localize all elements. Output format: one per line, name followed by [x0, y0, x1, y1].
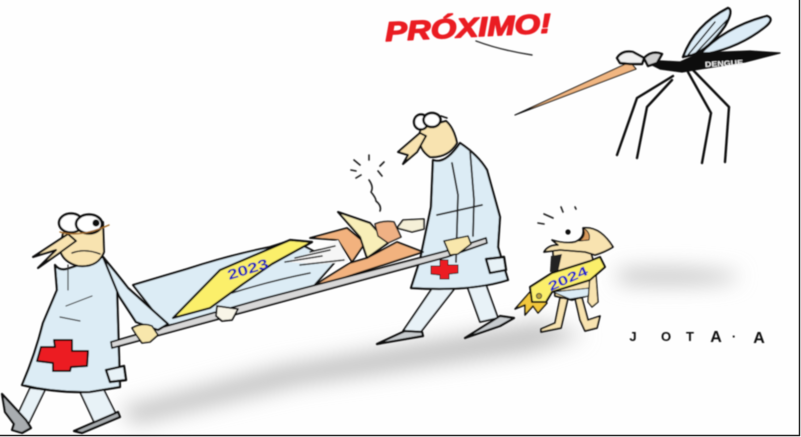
legs	[16, 388, 117, 425]
surprise marks	[538, 207, 576, 224]
child legs	[541, 298, 600, 332]
signature	[629, 329, 765, 347]
hand	[132, 324, 158, 343]
right doctor hands	[397, 219, 471, 255]
near hand	[444, 236, 471, 255]
sash 2024	[530, 257, 605, 302]
cap and glasses	[414, 114, 428, 130]
left doctor body	[2, 214, 126, 433]
chin shade line	[72, 251, 100, 254]
sash tassel	[515, 292, 547, 315]
right doctor	[377, 113, 514, 344]
sleeve	[103, 257, 168, 330]
cap and glasses	[59, 214, 83, 232]
speech line	[476, 41, 532, 55]
stretcher pole	[111, 238, 487, 348]
stretcher sheet	[133, 240, 335, 326]
signature: J	[629, 329, 637, 344]
shoes	[377, 316, 514, 344]
text: 2024: 2024	[546, 263, 591, 294]
stretcher and patient	[111, 212, 487, 348]
red cross	[431, 260, 458, 279]
proboscis	[515, 62, 636, 115]
ground shadows	[120, 268, 738, 424]
legs	[403, 282, 498, 333]
mosquito	[515, 8, 780, 163]
coat	[22, 257, 120, 392]
text: dengue: DENGUE	[705, 58, 743, 69]
child head	[544, 228, 613, 255]
white sheet lines	[286, 240, 349, 264]
yellow sash 2023	[173, 240, 312, 318]
patient collar	[338, 212, 388, 258]
patient head	[375, 221, 401, 243]
coat	[411, 143, 508, 289]
signature: A	[710, 329, 722, 346]
nappy	[553, 288, 590, 299]
signature: T	[686, 329, 694, 344]
beak	[398, 133, 426, 164]
red cross	[37, 340, 88, 371]
head	[617, 52, 644, 64]
far hand holding patient	[397, 219, 424, 232]
signature: O	[661, 329, 671, 344]
body and abdomen	[642, 51, 780, 72]
pocket	[486, 257, 506, 273]
child body	[553, 250, 596, 300]
pocket	[106, 366, 126, 382]
text: 2023: 2023	[225, 255, 270, 283]
eye	[565, 229, 571, 235]
head	[419, 121, 457, 157]
signature: A	[753, 330, 765, 347]
mouth crescent	[579, 228, 589, 241]
wing veins	[688, 20, 727, 55]
lower orange garment	[310, 242, 423, 288]
child 2024	[515, 207, 613, 332]
pain marks above patient	[351, 155, 384, 211]
child arm	[588, 275, 598, 307]
wings	[683, 8, 730, 57]
hanging hand	[216, 306, 238, 321]
title: proximo: PRÓXIMO!	[384, 8, 552, 47]
coat folds	[437, 150, 482, 262]
signature: ·	[732, 329, 736, 344]
left doctor arm	[103, 257, 168, 343]
shoes	[2, 394, 120, 433]
coat creases	[60, 265, 92, 321]
legs	[617, 70, 729, 163]
head	[60, 222, 104, 266]
dark collar	[550, 254, 562, 272]
upper orange garment	[310, 228, 365, 262]
beak	[33, 234, 76, 268]
